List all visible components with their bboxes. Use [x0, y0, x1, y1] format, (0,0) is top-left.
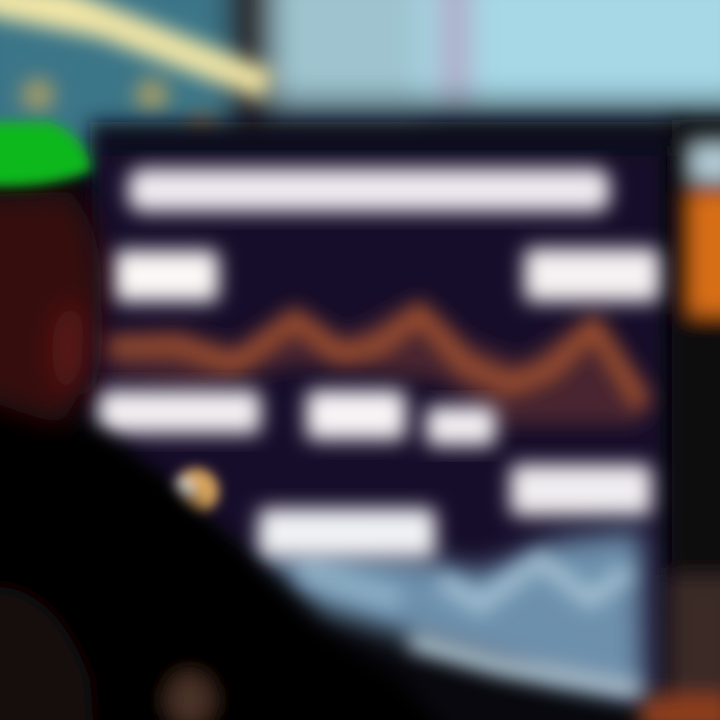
- line chart: orange series: [108, 298, 655, 425]
- light beam: [0, 0, 275, 100]
- label: upper left: [113, 250, 219, 302]
- label: lower centre: [258, 508, 436, 558]
- label: middle row centre: [306, 390, 406, 440]
- person: body in shadow: [0, 395, 460, 720]
- area chart highlights: [300, 560, 640, 690]
- right side objects: [640, 120, 720, 720]
- person: head: [0, 192, 101, 425]
- area chart: blue series: [255, 530, 645, 695]
- label: upper right: [524, 248, 660, 302]
- panel: monitor: [90, 122, 680, 700]
- icon: orange marker: [171, 468, 219, 514]
- title bar: [128, 168, 610, 212]
- person: green cap: [0, 122, 92, 187]
- label: middle row right: [426, 406, 496, 446]
- label: middle row left: [98, 390, 261, 434]
- background: room behind the monitor: [0, 0, 720, 160]
- background lights: [21, 78, 218, 146]
- label: lower right: [510, 464, 652, 516]
